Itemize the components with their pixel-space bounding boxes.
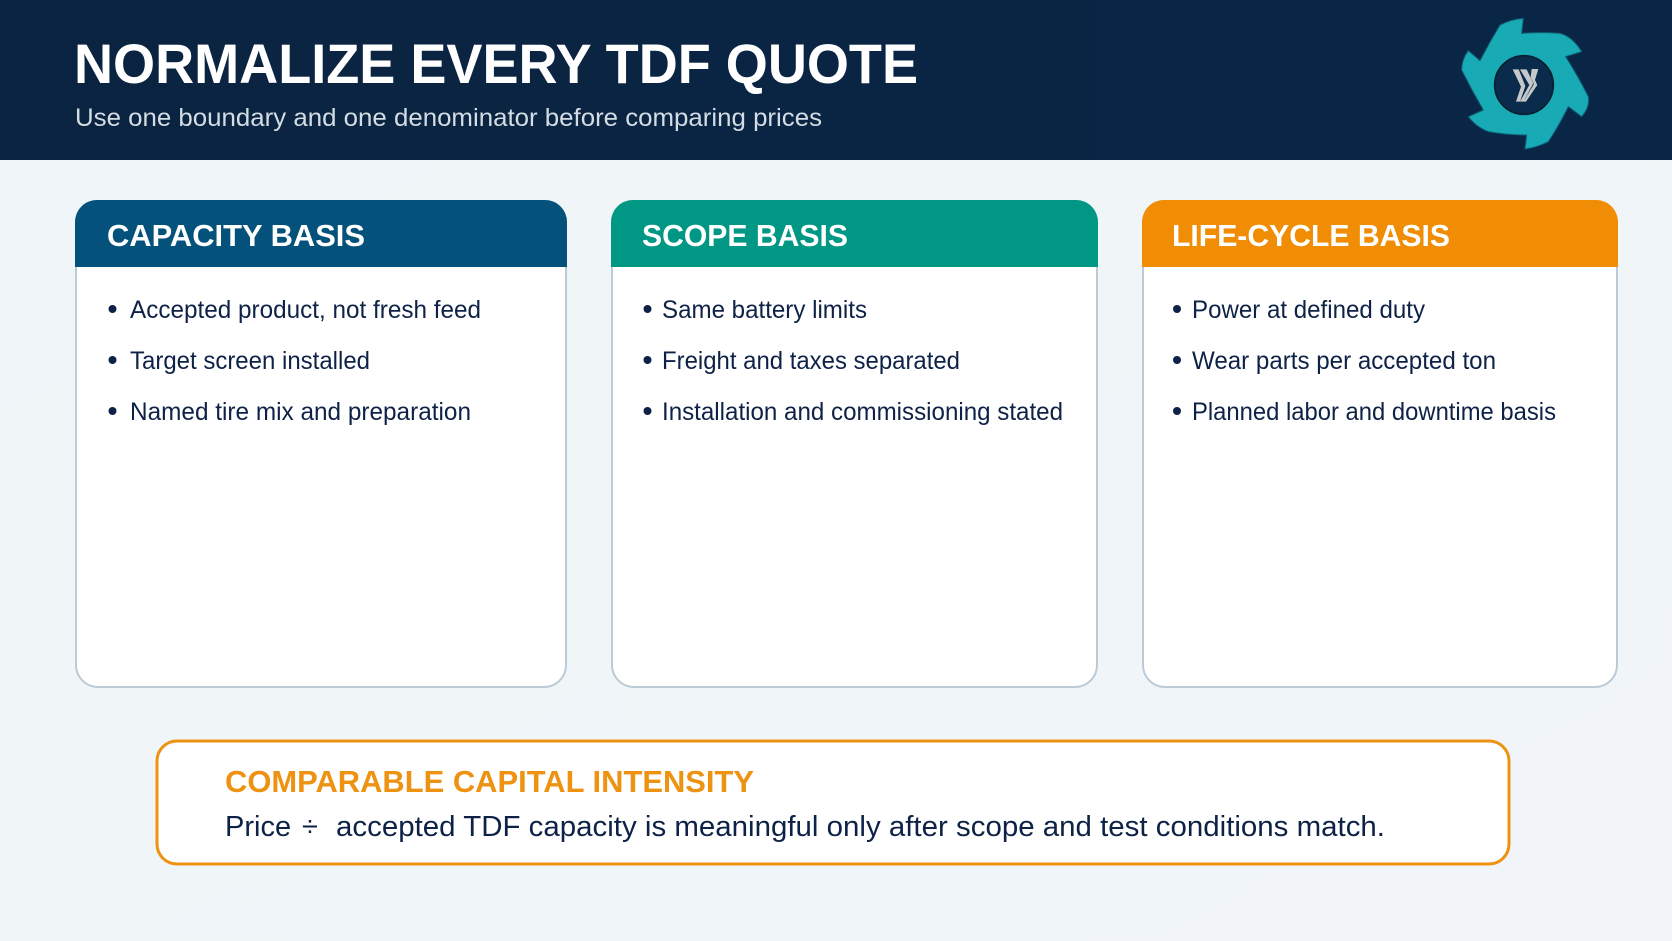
panel header [1142, 200, 1618, 267]
bullet list: Accepted product, not fresh feed [130, 296, 481, 324]
panel: life-cycle basis [1142, 200, 1618, 687]
panel header [611, 200, 1098, 267]
bullet list: Freight and taxes separated [662, 347, 960, 375]
bullet list: Target screen installed [130, 347, 370, 375]
callout text: ÷ [302, 811, 318, 843]
panel header [75, 200, 567, 267]
header band [0, 0, 1672, 160]
bullet list: Planned labor and downtime basis [1192, 398, 1556, 426]
title: NORMALIZE EVERY TDF QUOTE [74, 32, 918, 95]
bullet list [644, 296, 1063, 426]
bullet list: Same battery limits [662, 296, 867, 324]
callout: comparable capital intensity [157, 741, 1509, 864]
bullet list [108, 296, 481, 426]
subtitle: Use one boundary and one denominator before comparing prices [75, 104, 822, 132]
bullet list: Named tire mix and preparation [130, 398, 471, 426]
heading: SCOPE BASIS [642, 218, 848, 253]
bullet list [1173, 296, 1556, 426]
panel: capacity basis [75, 200, 567, 687]
heading: LIFE-CYCLE BASIS [1172, 218, 1450, 253]
callout text: Price [225, 811, 291, 843]
panel: scope basis [611, 200, 1098, 687]
heading: CAPACITY BASIS [107, 218, 365, 253]
callout heading: COMPARABLE CAPITAL INTENSITY [225, 764, 754, 799]
bullet list: Installation and commissioning stated [662, 398, 1063, 426]
bullet list: Power at defined duty [1192, 296, 1425, 324]
icon: shredder cutter logo [1462, 18, 1589, 149]
bullet list: Wear parts per accepted ton [1192, 347, 1496, 375]
callout text: accepted TDF capacity is meaningful only after scope and test conditions match. [336, 811, 1385, 843]
